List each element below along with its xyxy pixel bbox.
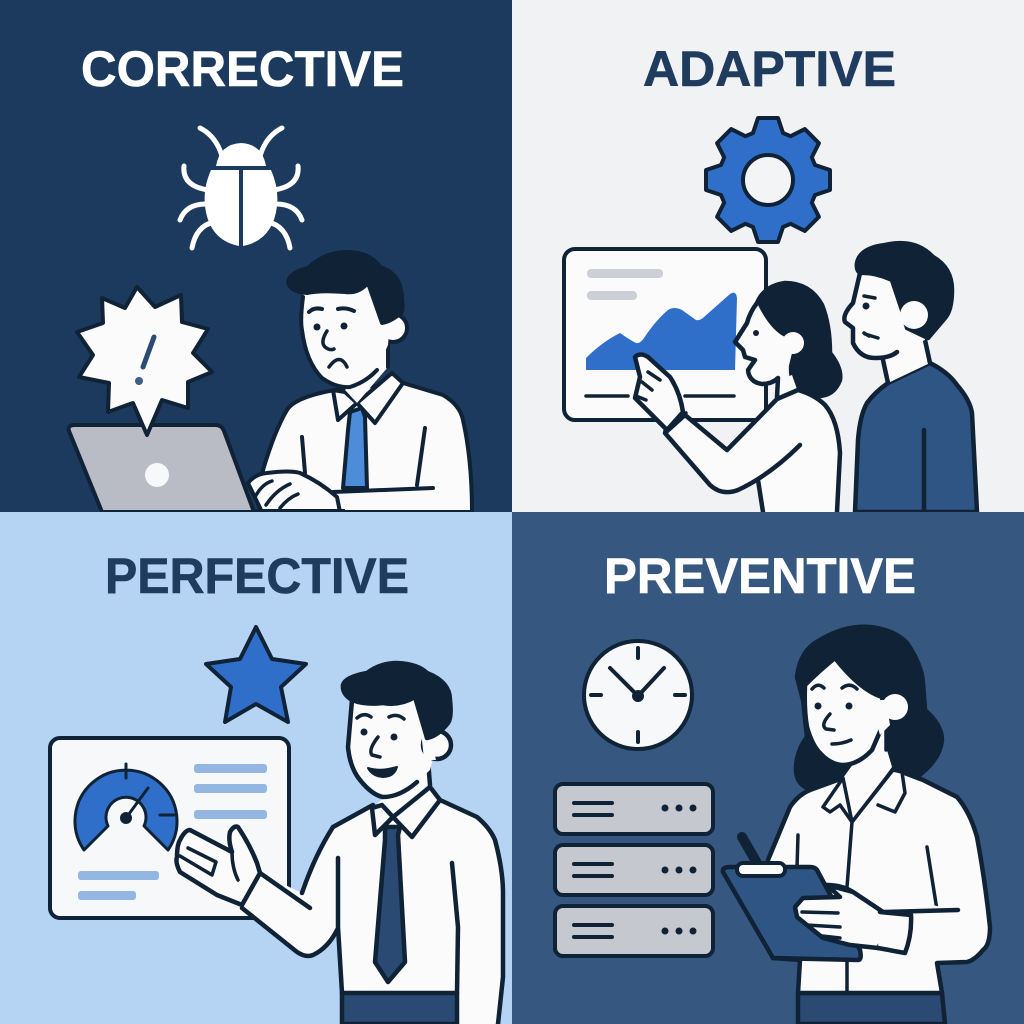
icon: gear — [706, 118, 830, 242]
icon: star — [206, 627, 306, 722]
illustration: presenting man — [176, 663, 503, 1024]
heading: corrective: CORRECTIVE — [81, 41, 404, 97]
illustration: laptop — [69, 425, 254, 512]
chart board — [564, 249, 766, 420]
heading: preventive: PREVENTIVE — [604, 548, 916, 604]
illustration: woman pointing — [635, 283, 840, 512]
illustration: man in navy sweater — [844, 243, 977, 512]
dashboard board — [50, 738, 289, 918]
illustration: woman with clipboard — [723, 627, 990, 1024]
panel: perfective — [0, 512, 512, 1024]
icon: bug — [180, 128, 302, 248]
panel: corrective — [0, 0, 512, 512]
panel: adaptive — [512, 0, 1024, 512]
illustration: worried man — [248, 252, 472, 512]
heading: perfective: PERFECTIVE — [105, 548, 409, 604]
icon: clock — [584, 641, 692, 749]
heading: adaptive: ADAPTIVE — [643, 41, 896, 97]
icon: server stack — [555, 784, 713, 956]
panel: preventive — [512, 512, 1024, 1024]
icon: alert burst — [77, 287, 212, 435]
